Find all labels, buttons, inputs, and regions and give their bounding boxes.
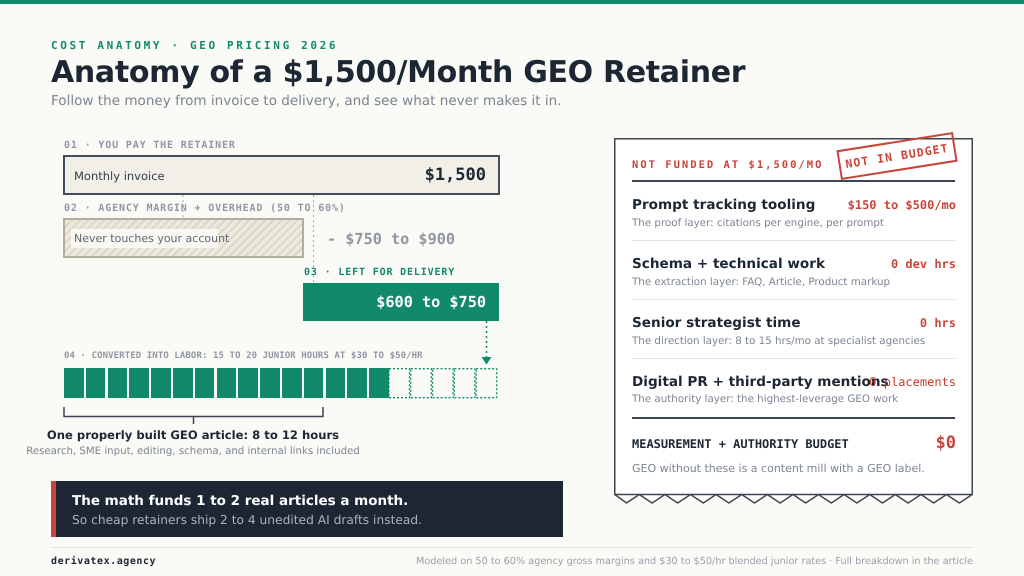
row note: The authority layer: the highest-leverage GEO work	[632, 393, 898, 405]
callout note: So cheap retainers ship 2 to 4 unedited AI drafts instead.	[72, 512, 422, 526]
row title: Senior strategist time	[632, 314, 801, 330]
row: prompt tracking	[632, 196, 956, 229]
row cost: $150 to $500/mo	[848, 198, 956, 212]
panel: delivery bar	[303, 283, 499, 321]
article heading: One properly built GEO article: 8 to 12 hours	[47, 428, 339, 442]
step 1 label: 01 · YOU PAY THE RETAINER	[64, 140, 236, 151]
stamp: not in budget	[836, 131, 958, 180]
row title: Schema + technical work	[632, 256, 825, 272]
budget note: GEO without these is a content mill with a GEO label.	[632, 462, 925, 475]
row note: The extraction layer: FAQ, Article, Product markup	[632, 276, 890, 288]
source note: Modeled on 50 to 60% agency gross margins and $30 to $50/hr blended junior rates · Full breakdown in the article	[416, 556, 973, 567]
row note: The proof layer: citations per engine, per prompt	[632, 217, 884, 229]
margin label: Never touches your account	[74, 232, 229, 245]
footer	[51, 547, 973, 572]
chart: hour blocks	[64, 368, 498, 398]
rule	[632, 180, 955, 182]
row: schema	[632, 256, 956, 288]
panel: not funded receipt	[614, 132, 973, 504]
bracket: one article span	[63, 407, 324, 424]
row: digital PR	[632, 374, 956, 405]
row cost: 0 hrs	[920, 316, 956, 330]
margin label	[71, 229, 218, 248]
panel: agency margin hatched bar	[63, 218, 304, 258]
callout accent	[51, 481, 56, 537]
budget total value: $0	[936, 433, 956, 453]
panel: monthly invoice bar	[63, 155, 500, 195]
row title: Digital PR + third-party mentions	[632, 374, 889, 390]
margin amount: - $750 to $900	[327, 230, 455, 248]
subtitle: Follow the money from invoice to delivery, and see what never makes it in.	[51, 92, 561, 108]
step 3 label: 03 · LEFT FOR DELIVERY	[304, 266, 455, 278]
row cost: 0 placements	[869, 374, 956, 388]
article note: Research, SME input, editing, schema, and internal links included	[26, 446, 360, 456]
delivery amount: $600 to $750	[376, 293, 486, 311]
stamp: not in budget: NOT IN BUDGET	[844, 140, 950, 171]
step 2 label: 02 · AGENCY MARGIN + OVERHEAD (50 TO 60%)	[64, 203, 346, 214]
invoice label: Monthly invoice	[74, 169, 165, 183]
arrow: delivery to hours	[482, 321, 492, 364]
brand: derivatex.agency	[51, 556, 156, 567]
header	[51, 39, 746, 108]
article caption	[26, 428, 360, 456]
row title: Prompt tracking tooling	[632, 196, 815, 212]
step 4 label: 04 · CONVERTED INTO LABOR: 15 TO 20 JUNIOR HOURS AT $30 TO $50/HR	[64, 350, 423, 360]
invoice amount: $1,500	[425, 165, 486, 185]
callout heading: The math funds 1 to 2 real articles a month.	[72, 492, 408, 508]
rule	[632, 416, 955, 418]
row: senior strategist	[632, 314, 956, 347]
receipt heading: NOT FUNDED AT $1,500/MO	[632, 159, 823, 171]
top accent bar	[0, 0, 1024, 4]
budget total label: MEASUREMENT + AUTHORITY BUDGET	[632, 437, 849, 451]
eyebrow: COST ANATOMY · GEO PRICING 2026	[51, 39, 338, 52]
row note: The direction layer: 8 to 15 hrs/mo at specialist agencies	[632, 335, 925, 347]
callout	[51, 481, 563, 537]
row cost: 0 dev hrs	[891, 256, 956, 270]
title: Anatomy of a $1,500/Month GEO Retainer	[51, 55, 745, 90]
